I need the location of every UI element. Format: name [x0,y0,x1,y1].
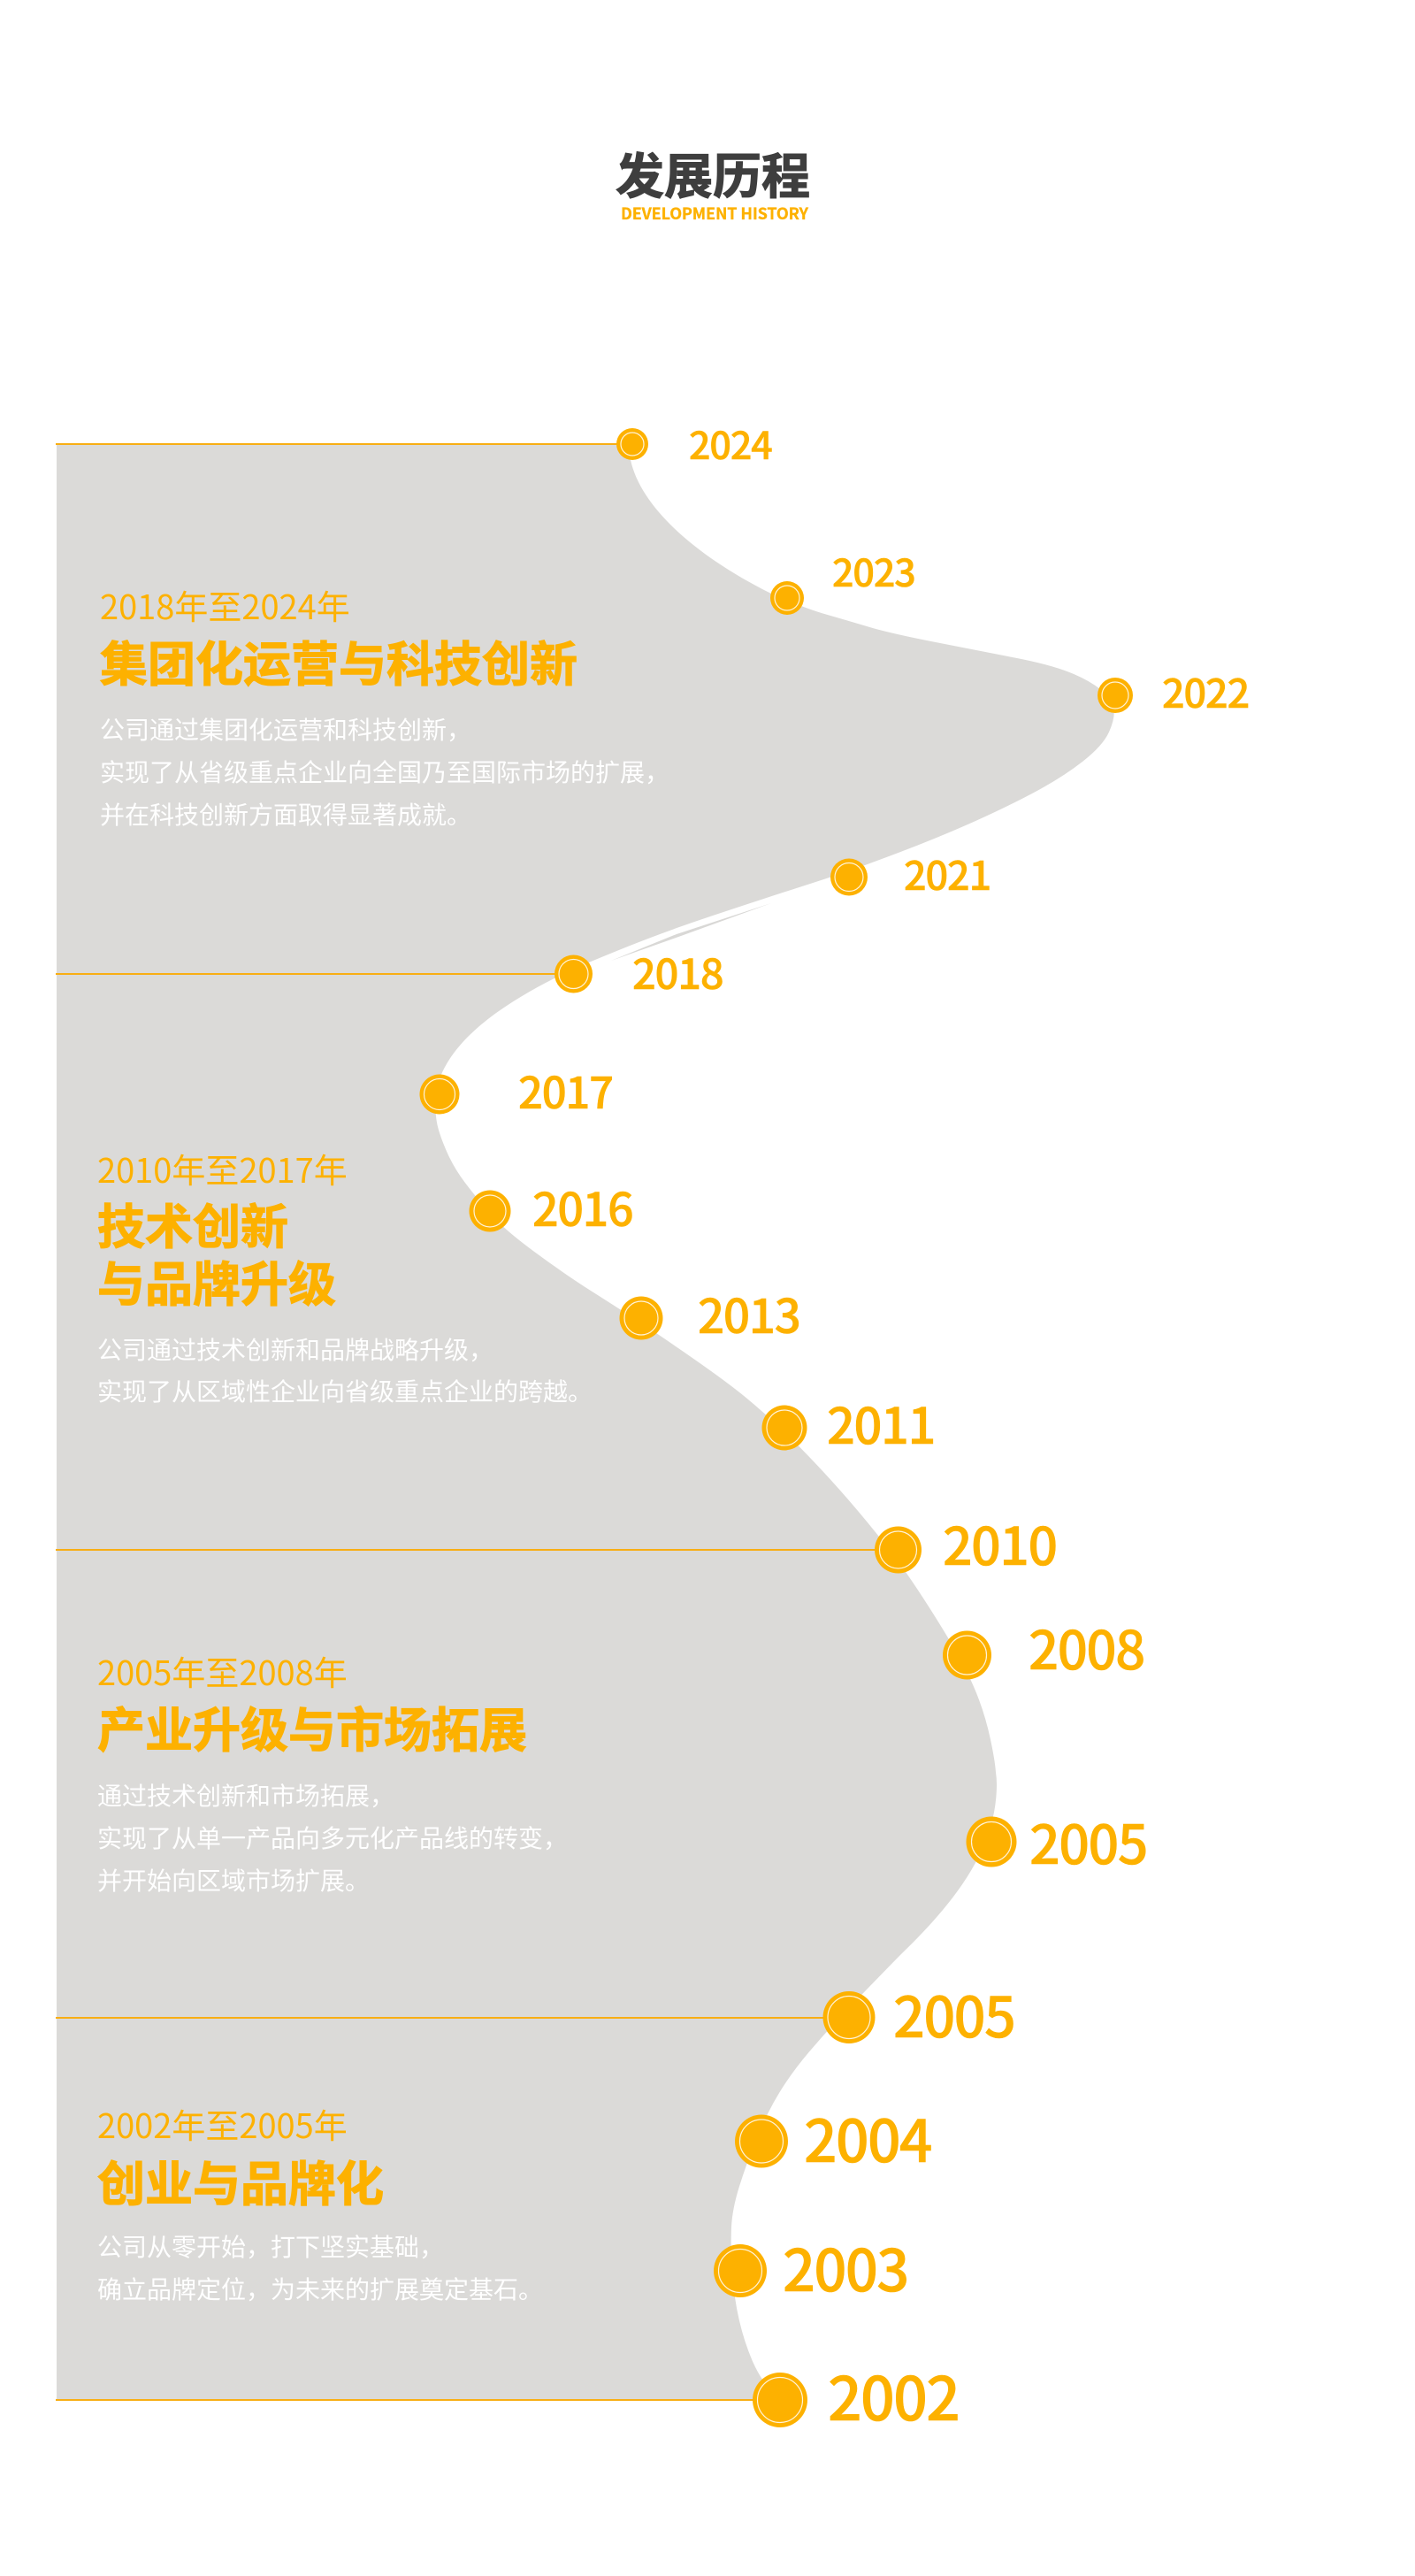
panel: 2005-2008: 2005年至2008年 [97,1646,348,1695]
title: 发展历程 [616,137,810,208]
node 2011: 2011 [827,1387,935,1459]
panel: 2002-2005: 创业与品牌化 [97,2145,384,2215]
node 2002: 2002 [828,2350,959,2438]
panel: 2010-2017 [97,1144,593,1408]
panel: 2010-2017: 2010年至2017年 [97,1144,348,1192]
section divider lines [56,444,880,2400]
node 2023: 2023 [832,543,915,598]
panel: 2005-2008: 并开始向区域市场扩展。 [97,1862,370,1898]
panel: 2002-2005: 公司从零开始，打下坚实基础， [97,2228,444,2264]
node 2004 [735,2095,931,2180]
node 2017 [419,1059,613,1122]
node 2003 [714,2225,908,2308]
node 2011 [762,1387,935,1459]
node 2022: 2022 [1162,662,1249,719]
node 2004: 2004 [804,2095,931,2180]
panel: 2002-2005: 确立品牌定位，为未来的扩展奠定基石。 [97,2271,543,2306]
panel: 2005-2008: 通过技术创新和市场拓展， [97,1777,394,1813]
node 2023 [770,543,915,615]
node 2021: 2021 [904,844,990,901]
node 2021 [830,844,990,901]
node 2008: 2008 [1029,1608,1144,1685]
panel: 2018-2024: 集团化运营与科技创新 [100,625,577,695]
panel: 2018-2024: 公司通过集团化运营和科技创新， [100,711,471,747]
node 2008 [943,1608,1144,1685]
panel: 2018-2024: 2018年至2024年 [100,580,350,629]
node 2002 [753,2350,959,2438]
node 2016 [469,1173,632,1239]
grey sliver near the 2018 node [611,903,771,961]
node 2005 lower: 2005 [893,1974,1014,2054]
panel: 2018-2024 [100,580,669,832]
grey wave background panel [57,444,1114,2400]
node 2005 upper [966,1801,1147,1880]
panel: 2002-2005 [97,2099,543,2306]
panel: 2010-2017: 与品牌升级 [97,1246,336,1315]
node 2017: 2017 [518,1059,613,1122]
node 2022 [1098,662,1249,719]
panel: 2005-2008: 产业升级与市场拓展 [97,1691,527,1761]
node 2005 upper: 2005 [1029,1801,1147,1880]
panel: 2010-2017: 公司通过技术创新和品牌战略升级， [97,1331,493,1367]
node 2013 [619,1280,800,1347]
node 2024: 2024 [689,416,772,471]
node 2005 lower [822,1974,1014,2054]
node 2013: 2013 [698,1280,800,1347]
node 2010: 2010 [943,1505,1057,1580]
node 2018 [555,940,723,1001]
node 2018: 2018 [632,940,723,1001]
node 2003: 2003 [783,2225,908,2308]
node 2010 [875,1505,1057,1580]
title: DEVELOPMENT HISTORY [621,202,809,225]
panel: 2010-2017: 实现了从区域性企业向省级重点企业的跨越。 [97,1373,593,1408]
panel: 2002-2005: 2002年至2005年 [97,2099,348,2148]
panel: 2010-2017: 技术创新 [97,1188,288,1258]
panel: 2018-2024: 并在科技创新方面取得显著成就。 [100,796,471,832]
panel: 2018-2024: 实现了从省级重点企业向全国乃至国际市场的扩展， [100,754,669,789]
panel: 2005-2008: 实现了从单一产品向多元化产品线的转变， [97,1820,568,1855]
panel: 2005-2008 [97,1646,568,1898]
node 2024 [616,416,772,471]
node 2016: 2016 [532,1173,632,1239]
